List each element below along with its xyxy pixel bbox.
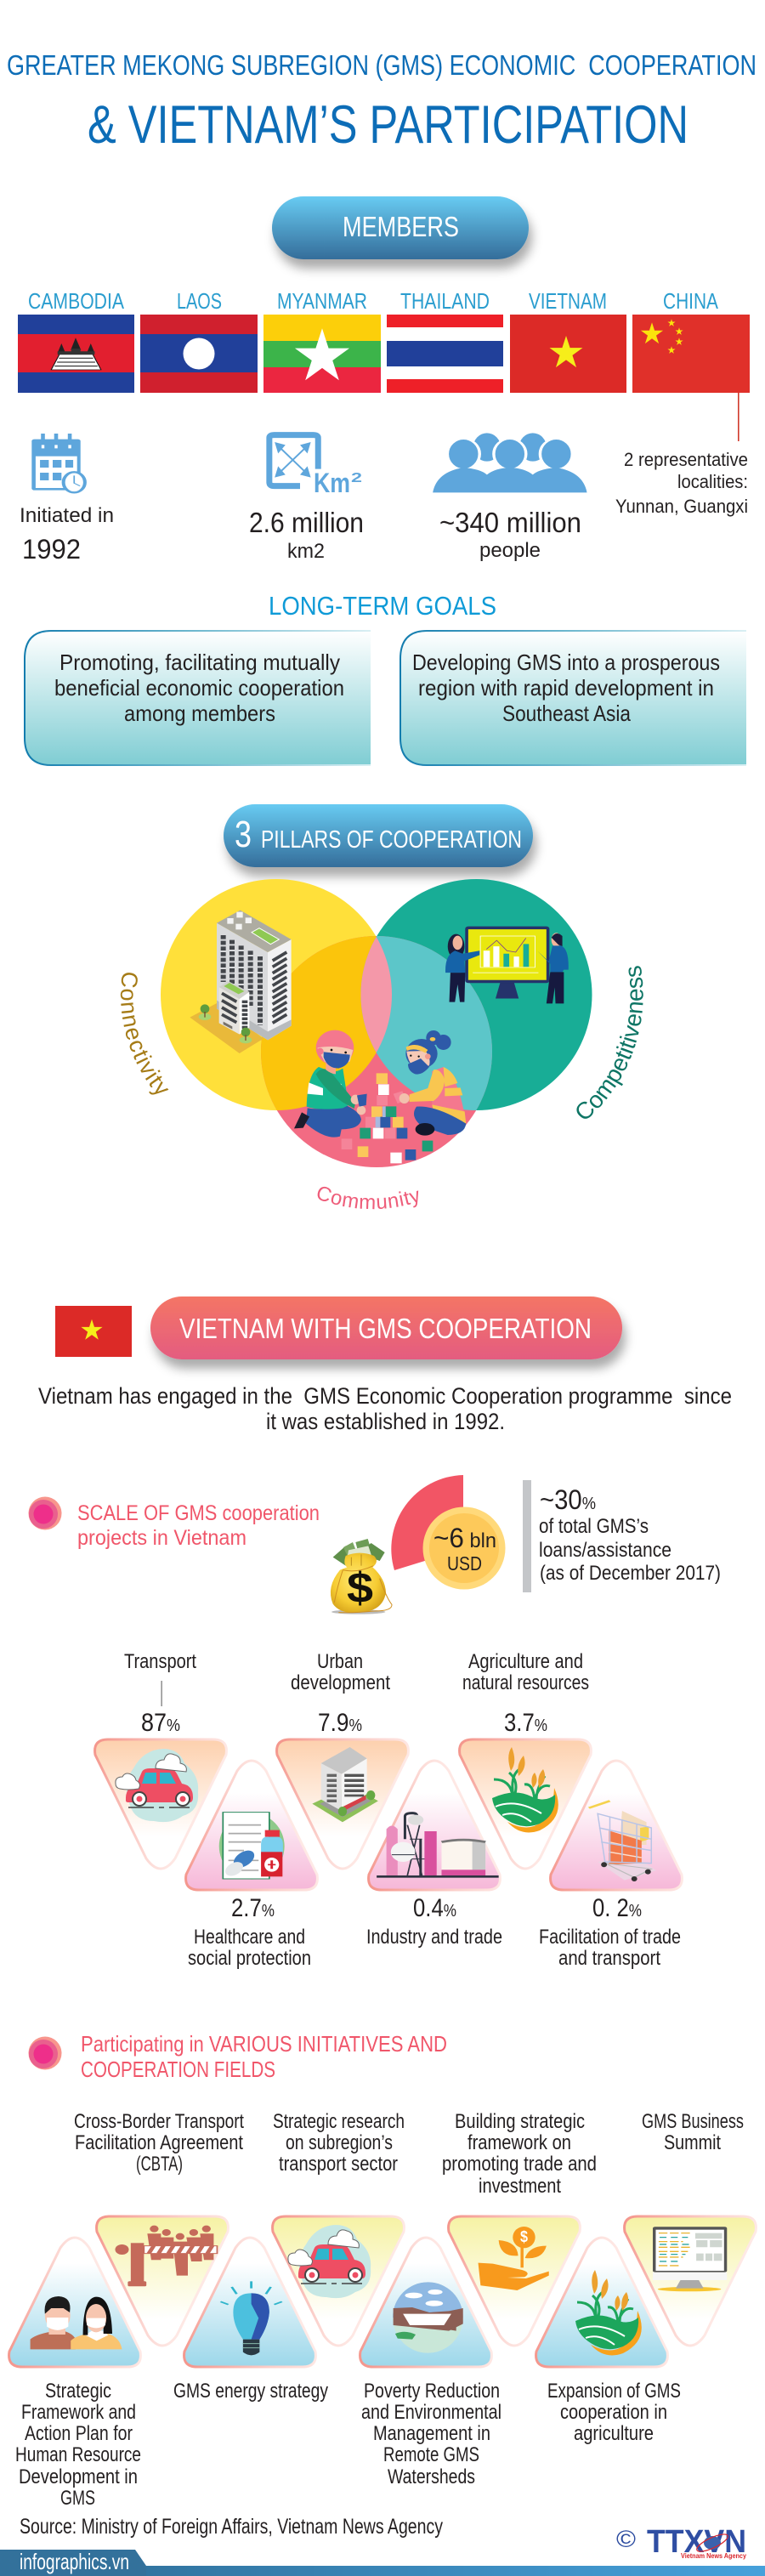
sector: agriculture 3.7%: [460, 1650, 591, 1869]
initiative: agriculture expansion: cooperation in: [560, 2401, 667, 2424]
icon: car: [116, 1749, 198, 1822]
stat: population: ~340 million: [439, 507, 581, 538]
flag: Thailand: [387, 288, 503, 393]
panel: goal 1: beneficial economic cooperation: [54, 675, 344, 701]
initiative: business summit: Summit: [664, 2131, 721, 2154]
stat: China localities note: Yunnan, Guangxi: [615, 496, 748, 517]
flag: Vietnam section marker: [55, 1306, 132, 1357]
footer bar: infographics.vn: [20, 2549, 129, 2574]
sector: urban development 7.9%: Urban: [317, 1650, 363, 1673]
callout: 30 percent of loans: (as of December 2017): [540, 1562, 721, 1585]
panel: goal 2: region with rapid development in: [418, 675, 714, 701]
subheading: scale of projects: projects in Vietnam: [77, 1526, 246, 1550]
panel: goal 2: Developing GMS into a prosperous: [412, 650, 720, 675]
initiative: poverty reduction and environment: Watersheds: [388, 2465, 475, 2488]
icon: border barrier with people: [115, 2226, 217, 2286]
footer bar: [0, 2549, 765, 2576]
icon: calendar: [31, 434, 85, 492]
chart: 6 bln USD pie: [391, 1475, 505, 1590]
country flags row: [18, 288, 750, 441]
initiative: poverty reduction and environment: Remote GMS: [383, 2443, 479, 2466]
initiative: CBTA: Cross-Border Transport: [74, 2110, 244, 2133]
panel: goal 1: [25, 631, 371, 765]
flag: Thailand: THAILAND: [400, 288, 490, 314]
initiative: human resource framework: Action Plan for: [25, 2422, 133, 2445]
subheading: scale of projects: [29, 1496, 320, 1550]
pillars pill heading: 3: [235, 814, 252, 855]
initiative: transport research: [273, 2110, 405, 2346]
initiative: agriculture expansion: Expansion of GMS: [547, 2380, 681, 2403]
initiative: CBTA: Facilitation Agreement: [75, 2131, 243, 2154]
initiative: poverty reduction and environment: [360, 2238, 502, 2488]
members pill heading: [272, 196, 529, 259]
icon: rice field: [575, 2270, 642, 2355]
long-term goals heading: LONG-TERM GOALS: [269, 591, 496, 621]
initiative: trade and investment framework: [442, 2110, 597, 2346]
stat: China localities note: [615, 449, 748, 517]
sector: trade facilitation 0.2%: [539, 1761, 682, 1970]
initiative: poverty reduction and environment: and Environmental: [361, 2401, 502, 2424]
sector: agriculture 3.7%: Agriculture and: [468, 1650, 583, 1673]
subheading: initiatives and fields: COOPERATION FIELDS: [81, 2057, 275, 2082]
icon: money bag: [331, 1539, 392, 1614]
flag: China: [632, 288, 750, 441]
flag: Laos: [140, 288, 258, 393]
sector: healthcare 2.7%: [186, 1761, 317, 1970]
stat: area: 2: [351, 471, 362, 485]
stat: initiated in 1992: [20, 434, 114, 565]
label: competitiveness: Competitiveness: [576, 966, 643, 1119]
initiative: human resource framework: Human Resource: [15, 2443, 141, 2466]
sector: urban development 7.9%: development: [291, 1671, 390, 1694]
stat: area: Km: [314, 468, 350, 498]
panel: goal 1: among members: [124, 701, 275, 726]
sector: trade facilitation 0.2%: and transport: [558, 1947, 660, 1970]
icon: hand with coin plant: [479, 2227, 549, 2290]
callout: 30 percent of loans: [523, 1480, 721, 1592]
flag: Myanmar: [264, 288, 381, 393]
initiative: poverty reduction and environment: Management in: [373, 2422, 490, 2445]
Vietnam with GMS pill heading: VIETNAM WITH GMS COOPERATION: [179, 1313, 592, 1344]
initiative: trade and investment framework: $: [520, 2228, 528, 2245]
sector: healthcare 2.7%: social protection: [188, 1947, 311, 1970]
flag: Cambodia: [18, 288, 134, 393]
initiative: agriculture expansion: [536, 2238, 681, 2445]
stat: population: [433, 433, 587, 562]
stat: population: people: [479, 539, 541, 562]
stat: area: 2.6 million: [249, 507, 364, 538]
Vietnam with GMS pill heading: [150, 1297, 622, 1359]
stat: area: km2: [287, 540, 325, 563]
stat: initiated in 1992: Initiated in: [20, 504, 114, 527]
initiative: human resource framework: Strategic: [45, 2380, 111, 2403]
label: community: Community: [318, 1187, 418, 1209]
icon: computer: [653, 2227, 727, 2291]
initiative: business summit: [625, 2110, 756, 2346]
icon: bullet: [29, 1496, 61, 1530]
initiative: human resource framework: GMS: [60, 2487, 95, 2510]
panel: goal 1: Promoting, facilitating mutually: [60, 650, 340, 675]
sector: agriculture 3.7%: 3.7%: [504, 1709, 547, 1737]
initiative: human resource framework: Development in: [19, 2465, 138, 2488]
initiative: trade and investment framework: investment: [479, 2175, 561, 2198]
subheading: scale of projects: SCALE OF GMS cooperation: [77, 1501, 320, 1525]
initiative: transport research: Strategic research: [273, 2110, 405, 2133]
icon: tower building: [190, 911, 292, 1053]
subheading: initiatives and fields: [29, 2031, 447, 2082]
logo: TTXVN Vietnam News Agency: TTXVN: [647, 2524, 746, 2560]
sector: trade facilitation 0.2%: 0. 2%: [592, 1894, 642, 1922]
initiative: trade and investment framework: framework on: [468, 2131, 571, 2154]
logo: TTXVN Vietnam News Agency: Vietnam News Agency: [681, 2552, 746, 2560]
icon: rice field: [492, 1747, 558, 1832]
panel: goal 2: [400, 631, 746, 765]
initiative: human resource framework: Framework and: [21, 2401, 136, 2424]
icon: car: [288, 2225, 371, 2298]
sector: industry and trade 0.4%: [366, 1761, 502, 1949]
stat: China localities note: 2 representative: [624, 449, 748, 470]
icon: presentation monitor: [445, 927, 569, 1003]
flag: Cambodia: CAMBODIA: [28, 288, 125, 314]
icon: children playing with blocks: [294, 1030, 466, 1163]
icon: people: [433, 433, 587, 492]
flag: Myanmar: MYANMAR: [277, 288, 367, 314]
sector: transport 87%: [95, 1650, 226, 1869]
intro paragraph: it was established in 1992.: [266, 1409, 505, 1434]
initiative: trade and investment framework: Building strategic: [455, 2110, 585, 2133]
members pill heading: MEMBERS: [343, 211, 459, 242]
icon: two masked people: [31, 2296, 122, 2349]
sector: industry and trade 0.4%: 0.4%: [413, 1894, 456, 1922]
flag: China: CHINA: [663, 288, 719, 314]
sector: transport 87%: Transport: [124, 1650, 196, 1673]
stat: initiated in 1992: 1992: [22, 534, 81, 565]
subheading: initiatives and fields: Participating in VARIOUS INITIATIVES AND: [81, 2031, 447, 2057]
chart: three pillars venn diagram: [161, 879, 592, 1167]
source line: Source: Ministry of Foreign Affairs, Vietnam News Agency: [20, 2515, 443, 2539]
pillars pill heading: [224, 804, 533, 867]
icon: industrial plant: [377, 1813, 499, 1878]
sector: agriculture 3.7%: natural resources: [462, 1671, 589, 1694]
icon: building: [312, 1747, 378, 1822]
logo: TTXVN Vietnam News Agency: ©: [616, 2526, 636, 2552]
sector: urban development 7.9%: 7.9%: [318, 1709, 362, 1737]
initiative: poverty reduction and environment: Poverty Reduction: [364, 2380, 500, 2403]
initiative: trade and investment framework: promoting trade and: [442, 2153, 597, 2176]
icon: money bag: $: [347, 1564, 373, 1612]
initiative: energy strategy: [173, 2238, 328, 2403]
sector: healthcare 2.7%: 2.7%: [231, 1894, 275, 1922]
sector: healthcare 2.7%: Healthcare and: [194, 1926, 305, 1949]
initiative: human resource framework: [9, 2238, 141, 2510]
flag: Vietnam: VIETNAM: [529, 288, 607, 314]
callout: 30 percent of loans: loans/assistance: [539, 1539, 672, 1562]
sector: transport 87%: 87%: [141, 1709, 180, 1737]
chart: 6 bln USD pie: ~6 bln: [434, 1523, 496, 1553]
icon: medical record and bottle: [219, 1813, 285, 1880]
sector: trade facilitation 0.2%: Facilitation of trade: [539, 1926, 681, 1949]
initiative: CBTA: (CBTA): [136, 2153, 183, 2176]
initiative: energy strategy: GMS energy strategy: [173, 2380, 328, 2403]
callout: 30 percent of loans: ~30%: [540, 1484, 596, 1515]
icon: waterfall landscape: [393, 2282, 463, 2353]
icon: bullet: [29, 2037, 61, 2069]
stat: China localities note: localities:: [677, 471, 748, 492]
icon: light bulb: [220, 2281, 282, 2355]
icon: km2 square: [269, 435, 318, 486]
panel: goal 2: Southeast Asia: [502, 701, 631, 726]
label: connectivity: Connectivity: [121, 973, 168, 1095]
initiative: transport research: transport sector: [279, 2153, 398, 2176]
sector: industry and trade 0.4%: Industry and trade: [366, 1926, 502, 1949]
initiative: CBTA: [74, 2110, 244, 2346]
initiative: transport research: on subregion’s: [286, 2131, 393, 2154]
callout: 30 percent of loans: of total GMS’s: [539, 1515, 649, 1538]
initiative: agriculture expansion: agriculture: [574, 2422, 654, 2445]
icon: shopping cart: [589, 1801, 656, 1881]
pillars pill heading: PILLARS OF COOPERATION: [261, 826, 522, 854]
stat: area: [249, 435, 364, 563]
sector: urban development 7.9%: [277, 1650, 408, 1869]
flag: Vietnam: [510, 288, 626, 393]
intro paragraph: [38, 1383, 732, 1434]
flag: Laos: LAOS: [177, 288, 222, 314]
chart: 6 bln USD pie: USD: [447, 1552, 482, 1575]
